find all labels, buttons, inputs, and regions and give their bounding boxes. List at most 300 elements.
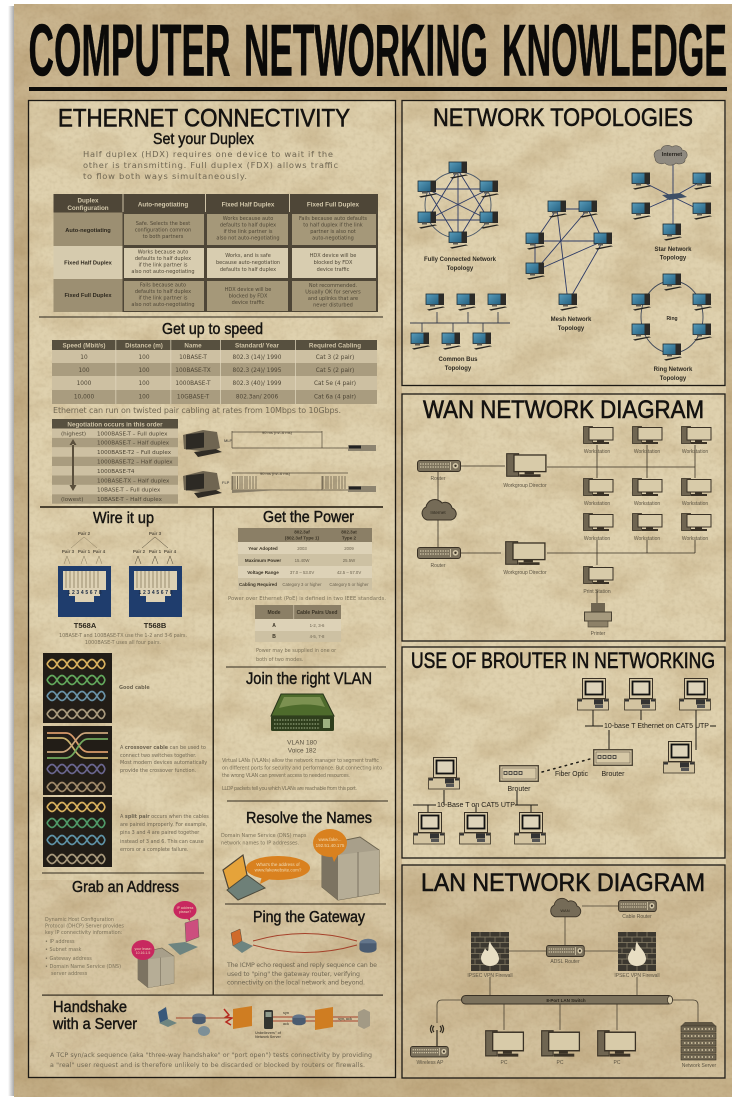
duplex table: because auto-negotiation [216, 260, 280, 266]
bubble: lookup question [246, 856, 310, 884]
duplex table: defaults to half duplex [135, 256, 191, 262]
mesh topology: Topology [558, 326, 585, 332]
bubble: lookup question: What's the address of [256, 862, 300, 867]
negotiation table: 100BASE-TX – Half duplex [97, 478, 170, 484]
DHCP text: Protocol (DHCP) Server provides [45, 924, 124, 930]
arrow: echo request [253, 934, 357, 941]
section: Resolve the Names [221, 810, 379, 900]
T568B jack: T568B [144, 621, 167, 630]
speed table: Standard/ Year [235, 342, 280, 350]
brouter lower [500, 766, 538, 793]
arrow: priority [70, 439, 76, 491]
T568B jack: Pair 4 [164, 549, 177, 554]
printer [584, 603, 612, 637]
handshake diagram: syn, ack [338, 1017, 352, 1021]
duplex table: blocked by FDX [229, 294, 268, 300]
speed table: 10GBASE-T [177, 394, 210, 400]
handshake diagram: Network Server [255, 1035, 281, 1039]
star topology [632, 145, 712, 262]
LAN PCs: PC [501, 1060, 508, 1066]
LAN switch [462, 996, 672, 1004]
full duplex timing diagram: FLP [222, 480, 230, 485]
duplex description: other is transmitting. Full duplex (FDX) allows traffic [83, 160, 338, 170]
handshake diagram: ack [283, 1022, 289, 1026]
negotiation table: (lowest) [61, 497, 83, 503]
DHCP text: • Subnet mask [45, 947, 82, 953]
heading: Handshake with a Server [52, 999, 137, 1033]
workstations: Workstation [682, 501, 708, 507]
T568A jack: Pair 1 [78, 549, 91, 554]
DHCP text: • Gateway address [45, 956, 92, 962]
cloud: Internet [422, 499, 456, 520]
heading: Ethernet Connectivity: ETHERNET CONNECTIVITY [58, 104, 350, 132]
speed table: 1000 [77, 381, 92, 387]
LAN PCs: PC [614, 1060, 621, 1066]
duplex description: to flow both ways simultaneously. [83, 171, 247, 181]
icon: network switch [271, 694, 334, 731]
divider [212, 508, 214, 995]
PoE standards table: 802.3at [341, 530, 357, 534]
ADSL router [546, 946, 584, 965]
wireless AP [410, 1025, 448, 1066]
panel: Use of Brouter [402, 647, 725, 858]
arrow: echo reply [253, 945, 357, 952]
full duplex timing diagram [183, 471, 376, 498]
wiring note [59, 633, 187, 646]
mesh topology [526, 200, 613, 332]
fiber optic link [542, 759, 590, 778]
T568B jack: 12345678 [138, 590, 173, 596]
full duplex timing diagram: 90 ms (m/–6 ms) [260, 471, 291, 476]
handshake diagram: syn [283, 1011, 289, 1015]
LAN PCs: PC [557, 1060, 564, 1066]
ring topology: Ring [666, 316, 678, 322]
DNS text [221, 833, 307, 846]
brouter upper: Brouter [602, 771, 625, 778]
icon: pink laptop [168, 919, 199, 955]
routers: Router [430, 563, 446, 569]
T568A jack: 12345678 [68, 590, 102, 596]
wiring note: 1000BASE-T uses all four pairs. [85, 640, 162, 646]
heading: Handshake with a Server: with a Server [52, 1016, 137, 1033]
negotiation table: 10BASE-T – Half duplex [97, 497, 163, 503]
rule [227, 800, 388, 802]
panel: LAN Network Diagram [402, 865, 725, 1078]
ping text: used to "ping" the gateway router, verifying [227, 971, 360, 978]
cable captions: A crossover cable can be used to [120, 745, 206, 751]
common bus topology: Common Bus [438, 357, 478, 363]
bubble: lookup question: www.fakewebsite.com? [255, 868, 302, 872]
negotiation table: 1000BASE-T – Full duplex [97, 432, 168, 438]
PoE modes table: 1-2, 3-6 [310, 623, 325, 628]
negotiation table [52, 419, 178, 504]
PoE standards table: Type 2 [342, 536, 357, 540]
PoE standards table [238, 528, 372, 590]
T568A jack [58, 531, 111, 630]
speed table: 10BASE-T [179, 355, 207, 361]
network server [681, 1022, 717, 1069]
workstations: Workstation [584, 449, 610, 455]
fully connected topology: Fully Connected Network [424, 257, 497, 263]
heading: LAN Network Diagram: LAN NETWORK DIAGRAM [421, 869, 705, 897]
speed table: 802.3 (24)/ 1995 [233, 368, 282, 374]
cable captions: Most modern devices automatically [120, 760, 207, 766]
speed table [52, 340, 377, 404]
cable captions: Good cable [119, 685, 150, 691]
workstations [584, 426, 711, 542]
half duplex timing diagram: MLP [224, 438, 233, 443]
LAN switch: 8-Port LAN Switch [546, 998, 586, 1003]
brouter upper [594, 750, 632, 778]
PoE modes table: A [272, 623, 276, 629]
panel: Network Topologies [402, 100, 725, 386]
network server: Network Server [682, 1063, 717, 1069]
negotiation table: 10BASE-T – Full duplex [97, 488, 161, 494]
subheading: Set your Duplex: Set your Duplex [153, 131, 254, 148]
firewalls: IPSEC VPN Firewall [614, 973, 660, 979]
computers [414, 678, 710, 844]
half duplex timing diagram: 90 ms (m/–6 ms) [262, 430, 293, 435]
routers [418, 460, 460, 569]
handshake diagram [158, 1006, 370, 1039]
DHCP text: server address [51, 971, 88, 977]
rule [42, 994, 383, 996]
PoE modes note [256, 648, 337, 663]
split pair cable image [43, 797, 112, 867]
heading: Handshake with a Server: Handshake [53, 999, 127, 1016]
rule [42, 872, 204, 874]
T568A jack: Pair 4 [93, 549, 106, 554]
icon: laptop [223, 855, 265, 900]
VLAN text: Virtual LANs (VLANs) allow the network manager to segment traffic [222, 758, 379, 764]
speed table: Cat 3 (2 pair) [316, 355, 354, 361]
firewalls [467, 932, 660, 979]
speed table: 802.3 (40)/ 1999 [233, 381, 282, 387]
T568B jack: Pair 2 [133, 549, 146, 554]
star topology: Star Network [654, 247, 692, 253]
PoE standards table: 25.5W [343, 558, 356, 563]
bubble: server: 10.16.1.5 [136, 951, 150, 955]
label: ethernet: 10-base T Ethernet on CAT5 UTP [604, 723, 709, 730]
speed table: 802.3an/ 2006 [236, 394, 278, 400]
DHCP text: • Domain Name Service (DNS) [45, 964, 121, 970]
DHCP text [45, 917, 124, 977]
DHCP text: Dynamic Host Configuration [45, 917, 114, 923]
duplex table: Usually OK for servers [305, 290, 361, 296]
VLAN text: on different ports for security and performance. But connecting into [222, 766, 382, 772]
heading: WAN Network Diagram: WAN NETWORK DIAGRAM [423, 396, 704, 424]
VLAN text [222, 758, 382, 792]
cloud: WAN [551, 898, 581, 917]
duplex table: Works because auto [138, 250, 188, 256]
VLAN labels: Voice 182 [288, 748, 317, 754]
speed table: 100 [138, 355, 150, 361]
PoE modes table: 4-5, 7-8 [310, 634, 325, 639]
duplex table [54, 194, 378, 312]
speed table: Required Cabling [309, 342, 361, 350]
ping text [226, 962, 377, 986]
duplex table: never disturbed [313, 302, 353, 308]
label: 10-base T: 10-Base T on CAT5 UTP [437, 802, 515, 809]
cloud: Internet: Internet [430, 510, 446, 515]
T568B jack [129, 531, 182, 630]
duplex table: Configuration [67, 205, 109, 212]
duplex table: HDX device will be [225, 287, 271, 293]
workstations: Workstation [584, 501, 610, 507]
DNS text: network names to IP addresses. [221, 840, 300, 846]
cable captions: errors or a complete failure. [120, 847, 189, 853]
speed table: 10 [80, 355, 88, 361]
fully connected topology [418, 162, 499, 272]
crossover cable image [43, 726, 112, 795]
subheading: Ping the Gateway: Ping the Gateway [253, 909, 365, 926]
bubble: laptop: please? [179, 910, 191, 914]
title [28, 10, 727, 92]
VLAN text: LLDP packets tell you which VLANs are reachable from this port. [222, 786, 357, 792]
VLAN labels [287, 740, 317, 754]
PoE standards table: 15.40W [295, 558, 310, 563]
PoE standards table: 802.3af [294, 530, 310, 534]
duplex table: to both partners [143, 234, 184, 240]
fully connected topology: Topology [447, 266, 474, 272]
speed table: 100BASE-TX [175, 368, 211, 374]
VLAN labels: VLAN 180 [287, 740, 317, 746]
speed table: 100 [138, 368, 150, 374]
mesh topology: Mesh Network [551, 317, 592, 323]
duplex table: defaults to half duplex [220, 267, 276, 273]
speed table: 10,000 [74, 394, 94, 400]
cable router: Cable Router [622, 914, 652, 920]
ring topology: Ring Network [654, 367, 693, 373]
bubble: laptop [174, 901, 196, 921]
common bus topology [410, 294, 510, 372]
duplex table: Fails because auto defaults [299, 216, 367, 222]
bubble: laptop: IP address [177, 906, 194, 910]
wireless AP: Wireless AP [417, 1060, 444, 1066]
heading: Network Topologies: NETWORK TOPOLOGIES [433, 104, 693, 132]
ring topology: Topology [660, 376, 687, 382]
PoE standards table: Category 5 or higher [329, 582, 369, 587]
speed table: Cat 5e (4 pair) [314, 381, 356, 387]
routers: Router [430, 476, 446, 482]
speed table: Name [184, 342, 202, 350]
section: Wire it up [43, 510, 209, 867]
PoE standards table: Voltage Range [247, 570, 279, 575]
duplex table: Works, and is safe [225, 253, 271, 259]
duplex table: Fails because auto [140, 282, 186, 288]
section: Get the Power [228, 509, 386, 663]
PoE modes table: Mode [267, 610, 281, 616]
rule [39, 316, 383, 318]
workstations: Workstation [682, 536, 708, 542]
panel: Ethernet connectivity [28, 100, 396, 1078]
print station [583, 566, 613, 595]
icon: DHCP server [138, 948, 174, 988]
speed table: Cat 6a (4 pair) [314, 394, 356, 400]
LAN connections [437, 906, 698, 1030]
workstations: Workstation [682, 449, 708, 455]
speed table: 100 [138, 394, 150, 400]
section: Grab an Address [45, 879, 199, 988]
rule [226, 666, 386, 668]
panel: WAN Network Diagram [402, 394, 725, 641]
DHCP text: • IP address [45, 939, 75, 945]
ping text: The ICMP echo request and reply sequence can be [226, 962, 377, 969]
speed table: Speed (Mbit/s) [62, 342, 106, 350]
handshake text: a "real" user request and is therefore unlikely to be discarded or blocked by routers or firewalls. [50, 1062, 365, 1069]
duplex table: Auto-negotiating [138, 202, 188, 208]
rule [225, 904, 386, 905]
PoE standards table: 42.5 – 57.0V [337, 570, 361, 575]
PoE modes table: Cable Pairs Used [297, 610, 337, 616]
PoE standards table: Category 3 or higher [282, 582, 322, 587]
duplex table: Auto-negotiating [65, 228, 111, 234]
PoE modes note: Power may be supplied in one or [256, 648, 337, 654]
section: Ping the Gateway [226, 909, 377, 986]
DNS text: Domain Name Service (DNS) maps [221, 833, 307, 839]
common bus topology: Topology [445, 366, 472, 372]
brouter lower: Brouter [508, 786, 531, 793]
icon: laptop [231, 929, 253, 953]
duplex table: partner is also not [310, 229, 356, 235]
ethernet rates note: Ethernet can run on twisted pair cabling at rates from 10Mbps to 10Gbps. [53, 406, 341, 415]
cable captions: instead of 3 and 6. This can cause [120, 839, 204, 845]
workstations: Workstation [584, 536, 610, 542]
subheading: Grab an Address: Grab an Address [72, 879, 179, 896]
PoE note: Power over Ethernet (PoE) is defined in two IEEE standards. [228, 596, 386, 602]
duplex description: Half duplex (HDX) requires one device to wait if the [83, 149, 333, 159]
PoE standards table: Year Adopted [248, 546, 278, 551]
ring topology [632, 274, 712, 382]
duplex table: defaults to half duplex [135, 289, 191, 295]
negotiation table: 1000BASE-T – Half duplex [97, 441, 170, 447]
PoE standards table: Maximum Power [245, 558, 281, 563]
speed table: 100 [78, 368, 90, 374]
duplex table: Not recommended. [309, 283, 357, 289]
duplex table: configuration common [135, 228, 191, 234]
duplex table: device traffic [232, 300, 265, 306]
workstations: Workstation [634, 449, 660, 455]
duplex table: Fixed Full Duplex [307, 202, 360, 208]
PoE standards table: 2003 [297, 546, 307, 551]
negotiation table: Negotiation occurs in this order [67, 422, 163, 428]
star topology: Topology [660, 256, 687, 262]
bubble: answer [313, 829, 347, 862]
duplex table: Works because auto [223, 216, 273, 222]
PoE standards table: 37.0 – 53.0V [290, 570, 314, 575]
speed table: 802.3 (14)/ 1990 [233, 355, 282, 361]
duplex table: also not auto-negotiating [131, 302, 195, 308]
title: COMPUTER [28, 10, 230, 92]
cable captions: are paired improperly. For example, [120, 822, 208, 828]
DHCP text: key IP connectivity information: [45, 930, 123, 936]
duplex table: Duplex [78, 198, 99, 204]
workstations: Workstation [634, 501, 660, 507]
good cable image [43, 653, 112, 723]
duplex description [83, 149, 338, 181]
T568B jack: Pair 3 [149, 531, 162, 536]
duplex table: if the link partner is [138, 296, 188, 302]
T568A jack: Pair 3 [62, 549, 75, 554]
duplex table: auto-negotiating [312, 236, 354, 242]
icon: gateway router [359, 939, 377, 953]
ping text: connectivity on the local network and beyond. [227, 980, 365, 986]
duplex table: also not auto-negotiating [131, 269, 195, 275]
section: Handshake with a Server [50, 999, 372, 1069]
cloud: Internet: Internet [662, 152, 682, 158]
bubble: answer: 192.51.40.175 [316, 843, 345, 848]
page edge shadow [8, 6, 15, 1096]
subheading: Get up to speed: Get up to speed [162, 321, 263, 338]
duplex table: Fixed Half Duplex [64, 260, 113, 266]
PoE modes table [255, 605, 341, 642]
negotiation table: 1000BASE-T4 [97, 469, 135, 475]
upper network lines [413, 710, 716, 812]
duplex table: also not auto-negotiating [216, 236, 280, 242]
cable router [618, 900, 656, 920]
PoE modes note: both of two modes. [256, 657, 304, 663]
subheading: Resolve the Names: Resolve the Names [246, 810, 372, 827]
cloud: WAN: WAN [560, 908, 570, 913]
duplex table: Fixed Full Duplex [64, 293, 112, 299]
icon: DNS server [322, 837, 379, 900]
VLAN text: the wrong VLAN can prevent access to needed resources. [222, 773, 350, 779]
T568B jack: Pair 1 [149, 549, 162, 554]
cable captions: provide the crossover function. [120, 768, 197, 774]
duplex table: if the link partner is [138, 262, 188, 268]
negotiation table: 1000BASE-T2 – Half duplex [97, 460, 173, 466]
bubble: server: your lease: [134, 947, 152, 951]
cable captions: connect two switches together. [120, 753, 197, 759]
workgroup directors: Workgroup Director [503, 483, 547, 489]
LAN PCs [486, 1031, 635, 1066]
negotiation table: (highest) [61, 432, 86, 438]
section: Join the right VLAN [222, 669, 382, 792]
handshake diagram: Unbelievers" of [255, 1031, 282, 1035]
duplex table: blocked by FDX [314, 260, 353, 266]
half duplex timing diagram [183, 430, 376, 457]
workstations: Workstation [634, 536, 660, 542]
handshake text: A TCP syn/ack sequence (aka "three-way handshake" or "port open") tests connectivity by providing [50, 1052, 372, 1059]
printer: Printer [591, 631, 606, 637]
bubble: answer: www.fake... [318, 837, 342, 842]
title: NETWORKING [244, 10, 488, 92]
fiber optic link: Fiber Optic [555, 771, 588, 778]
duplex table: defaults to half duplex [220, 222, 276, 228]
subheading: Join the right VLAN: Join the right VLAN [246, 669, 372, 688]
rule [40, 506, 383, 508]
duplex table: Safe. Selects the best [136, 221, 190, 227]
workgroup directors: Workgroup Director [503, 570, 547, 576]
duplex table: to half duplex if the link [303, 222, 363, 228]
handshake text [50, 1052, 372, 1069]
T568A jack: T568A [74, 621, 97, 630]
speed table: 100 [138, 381, 150, 387]
duplex table: and uplinks that are [308, 296, 358, 302]
subheading: Wire it up: Wire it up [93, 510, 154, 527]
cable captions: pins 3 and 4 are paired together [120, 830, 200, 836]
PoE standards table: Cabling Required [239, 582, 277, 587]
title rule [29, 87, 727, 91]
bubble: server [132, 940, 154, 960]
T568A jack: Pair 2 [78, 531, 91, 536]
duplex table: if the link partner is [223, 229, 273, 235]
PoE standards table: (802.3af Type 1) [285, 536, 320, 540]
cable captions [119, 685, 209, 853]
PoE standards table: 2009 [344, 546, 354, 551]
duplex table: device traffic [317, 267, 350, 273]
duplex table: HDX device will be [310, 253, 356, 259]
